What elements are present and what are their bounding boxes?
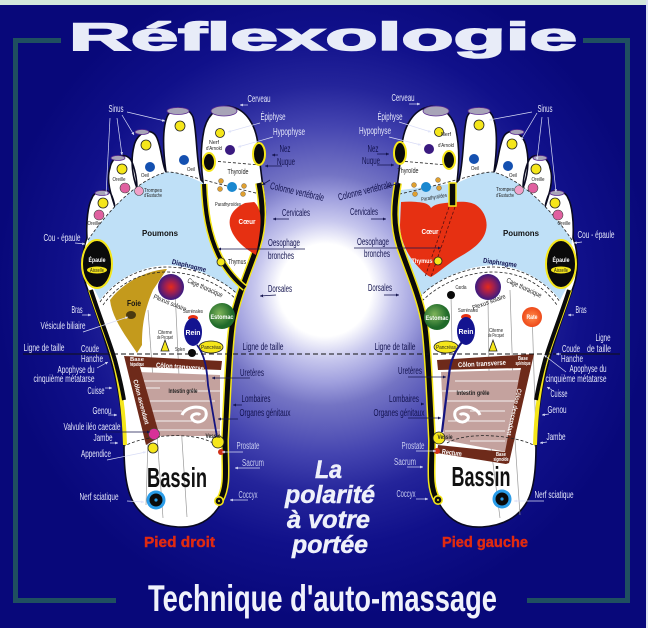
organ labels: Base	[518, 356, 528, 362]
organ labels: Splen	[175, 347, 185, 353]
spleen point	[188, 349, 196, 357]
adrenal	[461, 314, 471, 320]
labels: right side: Ligne de taille	[374, 342, 416, 353]
labels: left side: Sinus	[108, 104, 124, 115]
labels: left side: Coude	[81, 344, 99, 355]
sciatic point	[492, 490, 512, 508]
labels: right side: Genou	[548, 405, 566, 416]
organ labels: Thymus	[228, 259, 246, 266]
labels: left side: Dorsales	[268, 284, 292, 295]
labels: left side: Genou	[92, 406, 112, 417]
title: Réflexologie	[69, 16, 577, 59]
colon	[124, 356, 222, 445]
labels: right side	[337, 93, 615, 501]
centre slogan: La	[315, 456, 342, 484]
foot: left foot (pied gauche)	[394, 106, 577, 527]
organ labels: de Pecquet	[488, 333, 504, 339]
organ labels: Thyroïde	[398, 168, 419, 175]
shoulder	[546, 240, 576, 288]
labels: left side: Oesophage	[268, 238, 300, 249]
labels: right side: Sacrum	[394, 457, 416, 468]
organ labels: Nerf	[209, 140, 219, 146]
neck ellipse	[203, 153, 215, 171]
labels: left side: Valvule iléo caecale	[64, 422, 121, 433]
pineal point	[424, 144, 434, 154]
organ labels: Estomac	[210, 315, 234, 321]
shoulder	[82, 240, 112, 288]
organ labels: Côlon ascendant	[131, 379, 150, 426]
organ labels: Aisselle	[90, 268, 104, 274]
yellow reflex points	[98, 121, 225, 453]
organ labels: Poumons	[142, 229, 179, 238]
sciatic point	[146, 490, 166, 510]
ureter	[197, 345, 217, 437]
centre slogan	[284, 456, 375, 559]
labels: left side: Nuque	[277, 157, 295, 168]
organ labels: Thymus	[412, 258, 433, 265]
pink reflex points	[514, 183, 563, 220]
labels: right side: Prostate	[402, 441, 425, 452]
solar plexus	[158, 274, 184, 300]
organ labels: Base	[496, 452, 506, 458]
organ labels: Trompes	[496, 187, 514, 193]
labels: left side: Organes génitaux	[240, 408, 290, 419]
Bassin label: Bassin	[452, 461, 510, 492]
organ labels: Cœur	[238, 219, 256, 226]
labels: right side: Cuisse	[550, 389, 568, 400]
dashed lines	[88, 161, 260, 447]
organ labels: Côlon transverse	[156, 362, 204, 373]
labels: left side: Épiphyse	[260, 110, 286, 123]
intestine	[441, 370, 521, 452]
armpit	[87, 266, 107, 274]
organ labels: d'Eustache	[496, 193, 514, 199]
colon	[437, 354, 534, 464]
labels: right side: Nuque	[362, 156, 380, 167]
labels: right side: Organes génitaux	[374, 408, 424, 419]
caption: pied droit: Pied droit	[144, 534, 215, 551]
armpit	[551, 266, 571, 274]
labels: right side: de taille	[587, 344, 611, 355]
spine band	[220, 183, 262, 500]
foot outline	[395, 106, 577, 527]
prostate point	[218, 449, 224, 455]
organ labels: d'Eustache	[144, 193, 162, 199]
organ labels: Rectum	[441, 449, 462, 458]
organ labels: Pancréas	[201, 345, 221, 351]
sinus caps	[95, 106, 237, 196]
organ labels: Oreille	[558, 221, 570, 227]
lungs zone	[88, 172, 245, 300]
organ labels: Oeil	[141, 173, 149, 179]
organ labels: d'Arnold	[438, 143, 454, 149]
nose ellipse	[394, 142, 406, 164]
organ labels: Pancréas	[436, 345, 456, 351]
centre slogan: portée	[291, 531, 368, 559]
labels: right side: Cerveau	[392, 93, 414, 104]
labels: left side	[24, 94, 325, 503]
neck ellipse	[443, 151, 455, 169]
outer band	[90, 290, 125, 445]
subtitle: Technique d'auto-massage	[148, 578, 497, 619]
organ labels: Oreille	[112, 177, 126, 183]
organ labels: d'Arnold	[206, 146, 222, 152]
heart	[400, 202, 487, 277]
stomach	[424, 304, 450, 330]
labels: left side: Cerveau	[248, 94, 270, 105]
lungs zone	[398, 172, 572, 300]
organ labels: Cœur	[422, 229, 439, 236]
organ labels: Cage thoracique	[505, 277, 543, 300]
labels: right side: Bras	[576, 305, 586, 316]
arrows and leader lines: right side	[354, 104, 582, 501]
labels: right side: Dorsales	[368, 283, 392, 294]
top paper edge	[0, 0, 648, 5]
organ labels: Aisselle	[554, 268, 568, 274]
labels: left side: Nerf sciatique	[80, 492, 119, 503]
outer band	[535, 290, 570, 445]
labels: left side: Cervicales	[282, 208, 310, 219]
organ labels: Cardia	[456, 285, 467, 291]
nose ellipse	[253, 143, 265, 165]
labels: left side: bronches	[268, 251, 294, 262]
right paper edge	[646, 0, 648, 628]
organ labels: sigmoïde	[494, 457, 509, 463]
cardia point	[447, 291, 455, 299]
intestine	[138, 372, 220, 436]
labels: right side: Nerf sciatique	[534, 490, 574, 501]
labels: right side: Colonne vertébrale	[337, 179, 393, 203]
organ labels: splénique	[516, 361, 531, 367]
organ labels: Citerne	[158, 330, 172, 336]
waist dashed line	[113, 353, 560, 355]
waist line	[23, 353, 620, 355]
nerve lines	[146, 290, 187, 518]
Bassin label: Bassin	[147, 462, 207, 493]
pink reflex points	[94, 183, 160, 440]
dashed lines	[400, 161, 572, 447]
organ labels: Poumons	[503, 229, 540, 238]
organ labels: Vessie	[206, 433, 221, 440]
labels: left side: Prostate	[236, 441, 260, 452]
adrenal	[188, 315, 198, 321]
pineal point	[225, 145, 235, 155]
labels: left side: Sacrum	[242, 458, 264, 469]
labels: left side: Ligne de taille	[24, 343, 65, 354]
foot outline	[83, 106, 265, 527]
organ labels: Rate	[526, 315, 538, 321]
labels: left side: cinquième métatarse	[34, 374, 95, 385]
organ labels: Surrénales	[183, 309, 203, 315]
organ labels: Oeil	[509, 173, 517, 179]
labels: left side: Bras	[72, 305, 82, 316]
organ labels: de Pecquet	[157, 335, 173, 341]
sinus caps	[423, 106, 564, 196]
labels: left side: Cou - épaule	[44, 233, 81, 244]
organ labels: Diaphragme	[171, 259, 207, 274]
organ labels: Base	[130, 357, 144, 363]
kidney	[184, 318, 202, 346]
organ labels: Côlon transverse	[458, 360, 506, 369]
spine band	[395, 183, 437, 500]
labels: right side: Coccyx	[396, 489, 416, 500]
parathyroid points	[412, 178, 442, 196]
organ labels	[88, 140, 256, 440]
labels: right side: Sinus	[538, 104, 552, 115]
big toe stub band	[449, 183, 456, 206]
organ labels: Rein	[458, 329, 474, 336]
organ labels: Foie	[127, 299, 141, 308]
blue reflex points	[145, 155, 237, 192]
yellow reflex points	[433, 120, 560, 444]
labels: left side: Coccyx	[238, 490, 258, 501]
labels: right side: Épiphyse	[378, 110, 403, 123]
parathyroid points	[218, 178, 246, 196]
organ labels: Vessie	[438, 434, 453, 441]
labels: right side: Coude	[562, 344, 580, 355]
organ labels: hépatique	[130, 362, 144, 368]
labels: right side: Cervicales	[350, 207, 378, 218]
organ labels: Thyroïde	[228, 169, 249, 176]
foot: right foot (pied droit)	[82, 106, 265, 527]
labels: left side: Uretères	[240, 368, 264, 379]
foot shapes mirrored	[395, 106, 577, 527]
labels: right side: Hypophyse	[359, 126, 391, 137]
labels: left side: Appendice	[81, 449, 111, 460]
organ labels: Parathyroïdes	[421, 193, 448, 203]
caption: pied gauche: Pied gauche	[442, 534, 528, 551]
kidney	[457, 317, 475, 345]
labels: left side: Jambe	[94, 433, 113, 444]
nerve lines	[451, 290, 536, 518]
organ labels: Oreille	[532, 177, 544, 183]
liver	[110, 269, 167, 353]
coccyx point	[214, 496, 224, 506]
labels: right side: Ligne	[596, 333, 611, 344]
big toe band	[204, 184, 245, 288]
organ labels: Estomac	[426, 316, 449, 322]
organ labels: Intestin grêle	[168, 389, 198, 395]
organ labels: Oreille	[88, 221, 100, 227]
labels: right side: Uretères	[398, 366, 422, 377]
organ labels: Oeil	[471, 166, 479, 172]
gallbladder	[126, 311, 136, 319]
spleen organ	[522, 307, 542, 327]
labels: right side: Jambe	[546, 432, 566, 443]
prostate point	[434, 448, 440, 454]
organ labels: Cage thoracique	[186, 278, 224, 299]
labels: left side: Nez	[280, 144, 290, 155]
labels: left side: Hypophyse	[273, 127, 305, 138]
labels: right side: Apophyse du	[570, 364, 606, 375]
organ labels: Citerne	[489, 328, 503, 334]
organ labels: Intestin grêle	[456, 391, 490, 397]
labels: left side: Apophyse du	[58, 365, 94, 376]
coccyx point	[433, 495, 443, 505]
organ labels: Plexus solaire	[472, 293, 507, 312]
labels: left side: Lombaires	[242, 394, 270, 405]
organ labels	[398, 132, 570, 463]
centre slogan: polarité	[284, 481, 375, 509]
organ labels: Parathyroïdes	[215, 202, 241, 208]
labels: right side: Lombaires	[389, 394, 419, 405]
labels: left side: Vésicule biliaire	[40, 321, 86, 332]
labels: left side: Hanche	[81, 354, 103, 365]
stomach	[209, 303, 235, 329]
blue reflex points	[421, 154, 513, 192]
solar plexus	[475, 274, 501, 300]
arrows and leader lines: left side	[75, 105, 305, 502]
organ labels: Diaphragme	[483, 258, 517, 269]
organ labels: Épaule	[88, 256, 106, 264]
labels: right side: Oesophage	[357, 237, 389, 248]
labels: right side: cinquième métatarse	[546, 374, 607, 385]
organ labels: Plexus solaire	[152, 294, 188, 313]
labels: left side: Colonne vertébrale	[269, 181, 325, 204]
labels: right side: Cou - épaule	[578, 230, 615, 241]
labels: left side: Ligne de taille	[242, 342, 284, 353]
labels: right side: bronches	[364, 249, 390, 260]
organ labels: Nerf	[441, 132, 451, 138]
centre slogan: à votre	[287, 506, 370, 534]
labels: right side: Nez	[368, 144, 378, 155]
heart	[230, 202, 261, 255]
organ labels: Côlon descendant	[505, 388, 522, 437]
labels: left side: Cuisse	[88, 386, 105, 397]
organ labels: Oeil	[187, 167, 195, 173]
ureter	[442, 342, 462, 432]
organ labels: Épaule	[552, 256, 570, 264]
labels: right side: Hanche	[561, 354, 583, 365]
organ labels: Rein	[186, 330, 200, 337]
organ labels: Trompes	[144, 188, 162, 194]
organ labels: Surrénales	[458, 308, 478, 314]
